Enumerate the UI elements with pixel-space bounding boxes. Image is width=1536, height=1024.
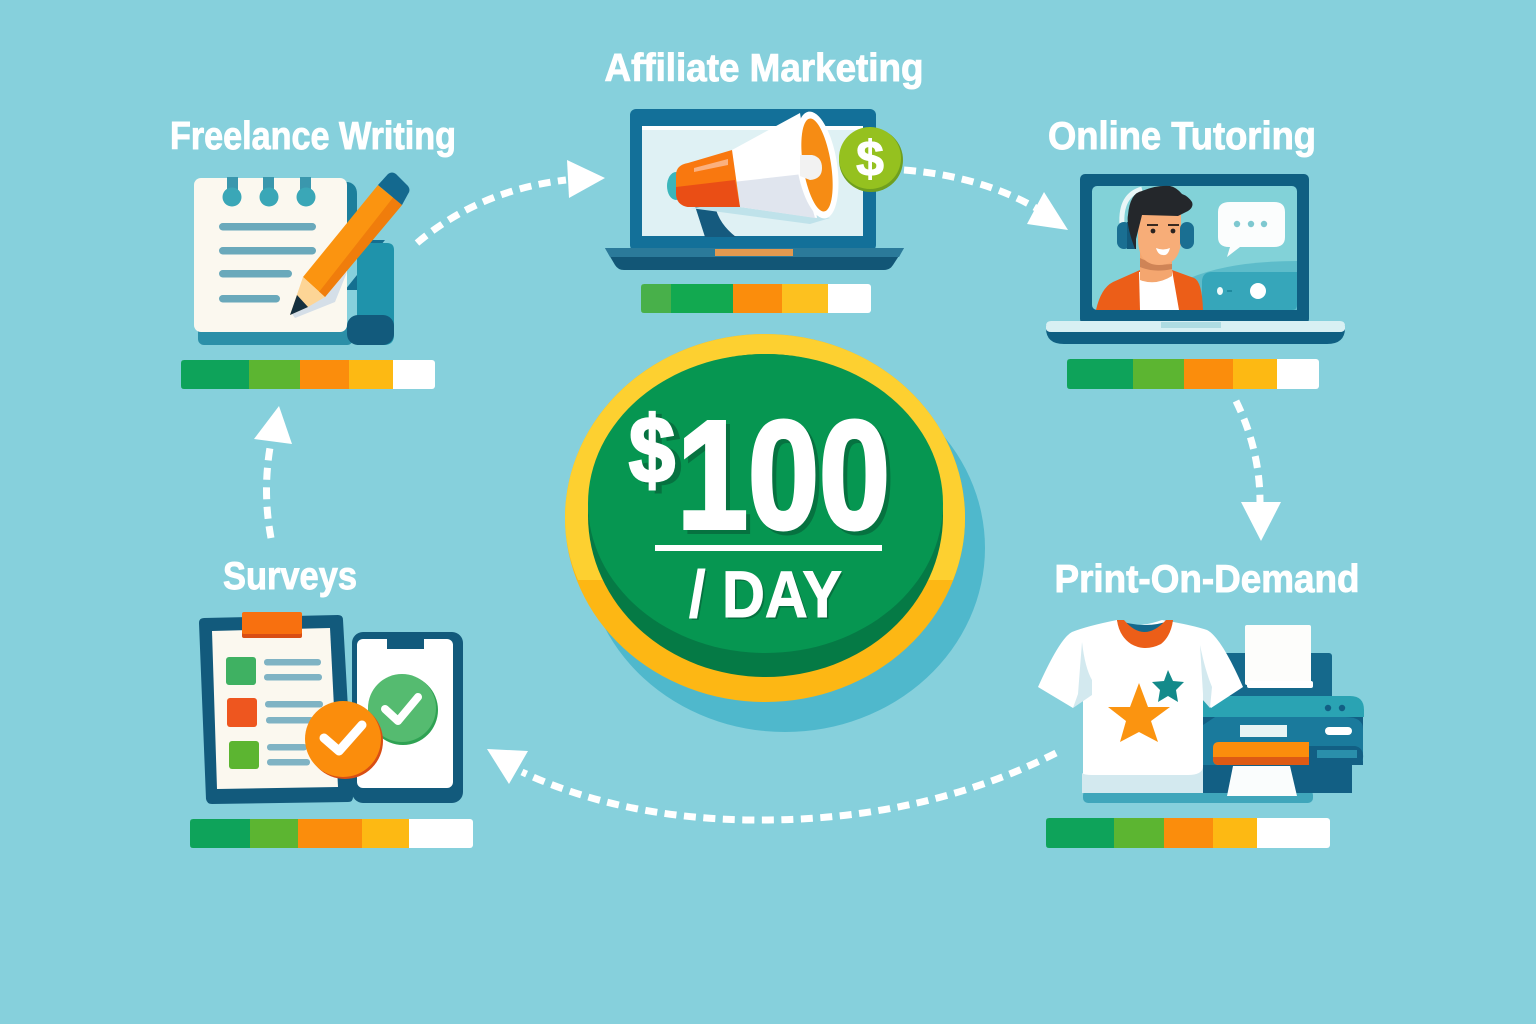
- icon: notepad and pencil: [194, 172, 410, 345]
- price: 100: [677, 389, 890, 561]
- price: [629, 389, 894, 565]
- heading: Surveys: Surveys: [223, 555, 357, 598]
- rating bar: Online Tutoring: [1067, 359, 1319, 389]
- icon: laptop with megaphone: [605, 109, 904, 270]
- rating bar: Surveys: [190, 819, 473, 848]
- heading: Print-On-Demand: Print-On-Demand: [1054, 558, 1360, 601]
- orange check badge: [305, 701, 383, 779]
- price: 100: [681, 393, 894, 565]
- icon: dollar coin: $: [856, 131, 884, 187]
- arrow: Affiliate Marketing to Online Tutoring: [904, 170, 1068, 230]
- icon: t-shirt and printer: [1038, 620, 1364, 803]
- arrow: Freelance Writing to Affiliate Marketing: [417, 160, 605, 243]
- rating bar: Freelance Writing: [181, 360, 435, 389]
- rating bar: Print-On-Demand: [1046, 818, 1330, 848]
- speech bubble: [1218, 202, 1285, 257]
- icon: survey clipboard and phone: [199, 612, 463, 804]
- heading: Affiliate Marketing: Affiliate Marketing: [604, 47, 924, 90]
- arrow: Print-On-Demand to Surveys: [487, 749, 1056, 820]
- price: $: [635, 400, 681, 505]
- per day: / DAY: [691, 559, 844, 633]
- green check badge: [368, 674, 438, 745]
- icon: dollar coin: [839, 127, 903, 192]
- arrow: Surveys to Freelance Writing: [254, 406, 292, 538]
- center badge: $100 / DAY: [565, 334, 985, 732]
- rating bar: Affiliate Marketing: [641, 284, 871, 313]
- arrow: Online Tutoring to Print-On-Demand: [1236, 401, 1281, 541]
- price: $: [629, 397, 675, 502]
- heading: Freelance Writing: Freelance Writing: [170, 115, 456, 158]
- heading: Online Tutoring: Online Tutoring: [1048, 115, 1316, 158]
- tutor: [1096, 186, 1203, 310]
- per day: / DAY: [689, 557, 842, 631]
- icon: laptop with tutor video: [1046, 174, 1345, 344]
